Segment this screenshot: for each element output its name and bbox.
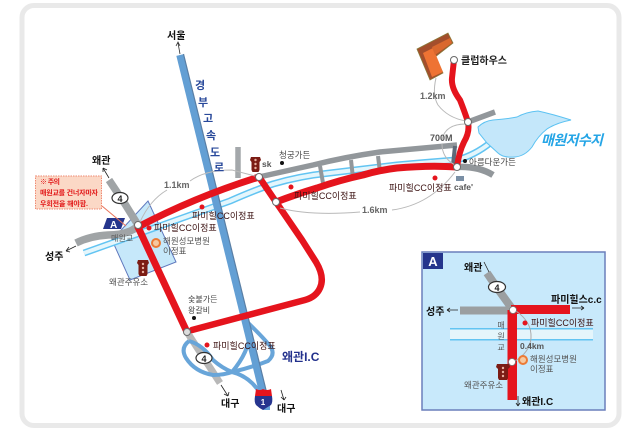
landmark: cafe: [454, 176, 473, 192]
gas station sk: [250, 157, 272, 172]
callout: caution note: [36, 176, 126, 226]
sign marker: right: [389, 176, 452, 193]
gray local roads: [238, 112, 495, 183]
inset direction: Waegwan: 왜관: [464, 262, 482, 274]
distance arcs: [140, 78, 466, 222]
sign marker: near junction: 파미힐CC이정표: [192, 210, 255, 221]
inset tag: [423, 253, 443, 269]
expressway 1 shield: 1: [261, 398, 266, 407]
gas station: waegwan: [109, 260, 149, 287]
inset hospital sign: [519, 354, 577, 374]
reservoir: [478, 111, 571, 157]
callout: caution note: 우회전을 해야함.: [40, 199, 88, 208]
direction: Daegu left: 대구: [221, 397, 239, 410]
inset bridge label: 교: [497, 343, 505, 352]
clubhouse building: [417, 33, 453, 80]
expressway vertical label: 부: [198, 96, 208, 109]
distance label 1.1km: 1.1km: [164, 180, 190, 190]
expressway vertical label: 고: [203, 113, 213, 125]
garden landmark: [188, 294, 217, 320]
inset sign marker: 파미힐CC이정표: [531, 317, 594, 328]
inset panel A: [422, 252, 605, 410]
direction: Seoul: [167, 29, 185, 54]
inset tag: A: [428, 254, 438, 269]
reservoir label: 매원저수지: [541, 132, 605, 148]
sign marker: upper centre: [288, 184, 357, 201]
inset route 4 shield: [488, 282, 506, 293]
inset direction: Pamihills: [551, 293, 602, 310]
red route: [138, 60, 468, 332]
expressway vertical label: 도: [210, 146, 220, 159]
sign marker: interchange: 파미힐CC이정표: [213, 340, 276, 351]
expressway vertical label: 경: [195, 79, 205, 92]
sign marker: junction A: 파미힐CC이정표: [154, 222, 217, 233]
area A highlight: [112, 201, 176, 280]
direction: Daegu left: [221, 385, 239, 410]
distance label 1.6km: 1.6km: [362, 205, 388, 215]
clubhouse label: 클럽하우스: [461, 54, 507, 67]
inset gas station: [464, 364, 510, 390]
inset bridge label: [497, 321, 505, 352]
expressway vertical label: 로: [214, 161, 224, 174]
inset direction: Seongju: 성주: [426, 306, 444, 318]
inset arc: [515, 311, 531, 361]
distance label 1.2km: 1.2km: [420, 91, 446, 101]
area A tag: [103, 218, 125, 231]
hospital sign: 해원성모병원: [163, 236, 210, 246]
route 4 shield: north: [112, 192, 128, 204]
expressway: [180, 55, 263, 393]
inset bridge label: 매: [497, 321, 505, 330]
interchange ramps: [184, 320, 273, 390]
inset gas station: 왜관주유소: [464, 380, 503, 390]
sign marker: upper centre: 파미힐CC이정표: [294, 190, 357, 201]
landmark: cheonggung garden: 청궁가든: [279, 150, 310, 160]
gas station sk: sk: [262, 159, 272, 169]
expressway edge: [184, 54, 266, 392]
route 4 road north-west: [76, 180, 138, 243]
sign marker: right: 파미힐CC이정표: [389, 182, 452, 193]
gas station: waegwan: 왜관주유소: [109, 277, 148, 287]
inset direction: Pamihills: 파미힐스c.c: [551, 293, 602, 306]
landmark: beautiful garden: 아름다운가든: [469, 157, 516, 167]
inset direction: Seongju: [426, 306, 458, 318]
callout: caution note: 매원교를 건너자마자: [40, 188, 99, 197]
inset red route: [508, 305, 570, 400]
callout: caution note: ※ 주의: [40, 177, 60, 186]
direction: Seongju: 성주: [45, 251, 63, 263]
bridge label: 매원교: [111, 234, 133, 243]
landmark: cafe: cafe': [454, 182, 473, 192]
area A tag: A: [110, 220, 117, 231]
inset direction: Waegwan: [464, 262, 489, 274]
direction: Seongju: [45, 246, 76, 263]
inset hospital sign: 해원성모병원: [530, 354, 577, 364]
expressway 1 shield: [255, 389, 272, 410]
garden landmark: 왕갈비: [188, 306, 210, 315]
direction: Daegu right: [277, 390, 295, 415]
garden landmark: 숯불가든: [188, 294, 217, 304]
route 4 shield: south: 4: [201, 354, 207, 364]
inset distance: 0.4km: [520, 341, 545, 351]
inset direction: Waegwan IC: 왜관I.C: [522, 396, 553, 408]
inset bridge label: 원: [497, 332, 505, 341]
distance label 700M: 700M: [430, 133, 453, 143]
direction: Seoul: 서울: [167, 29, 185, 42]
inset nodes: [508, 306, 516, 366]
stream: [84, 143, 490, 253]
inset stream: [450, 328, 593, 340]
inset gray roads: [460, 273, 513, 310]
expressway vertical label: 속: [206, 129, 216, 142]
route nodes: [134, 56, 472, 336]
interchange label: 왜관I.C: [282, 350, 320, 364]
hospital sign: [152, 236, 210, 256]
inset hospital sign: 이정표: [530, 364, 554, 374]
route 4 road south: [187, 332, 220, 383]
hospital sign: 이정표: [163, 246, 187, 256]
expressway vertical label: [195, 79, 224, 174]
sign marker: near junction: [192, 204, 255, 221]
inset route 4 shield: 4: [494, 283, 500, 293]
route 4 shield: south: [196, 352, 212, 364]
route 4 shield: north: 4: [117, 194, 123, 204]
direction: Waegwan: 왜관: [92, 155, 110, 167]
direction: Daegu right: 대구: [277, 402, 295, 415]
direction: Waegwan: [92, 155, 110, 178]
landmark: cheonggung garden: [279, 150, 310, 165]
